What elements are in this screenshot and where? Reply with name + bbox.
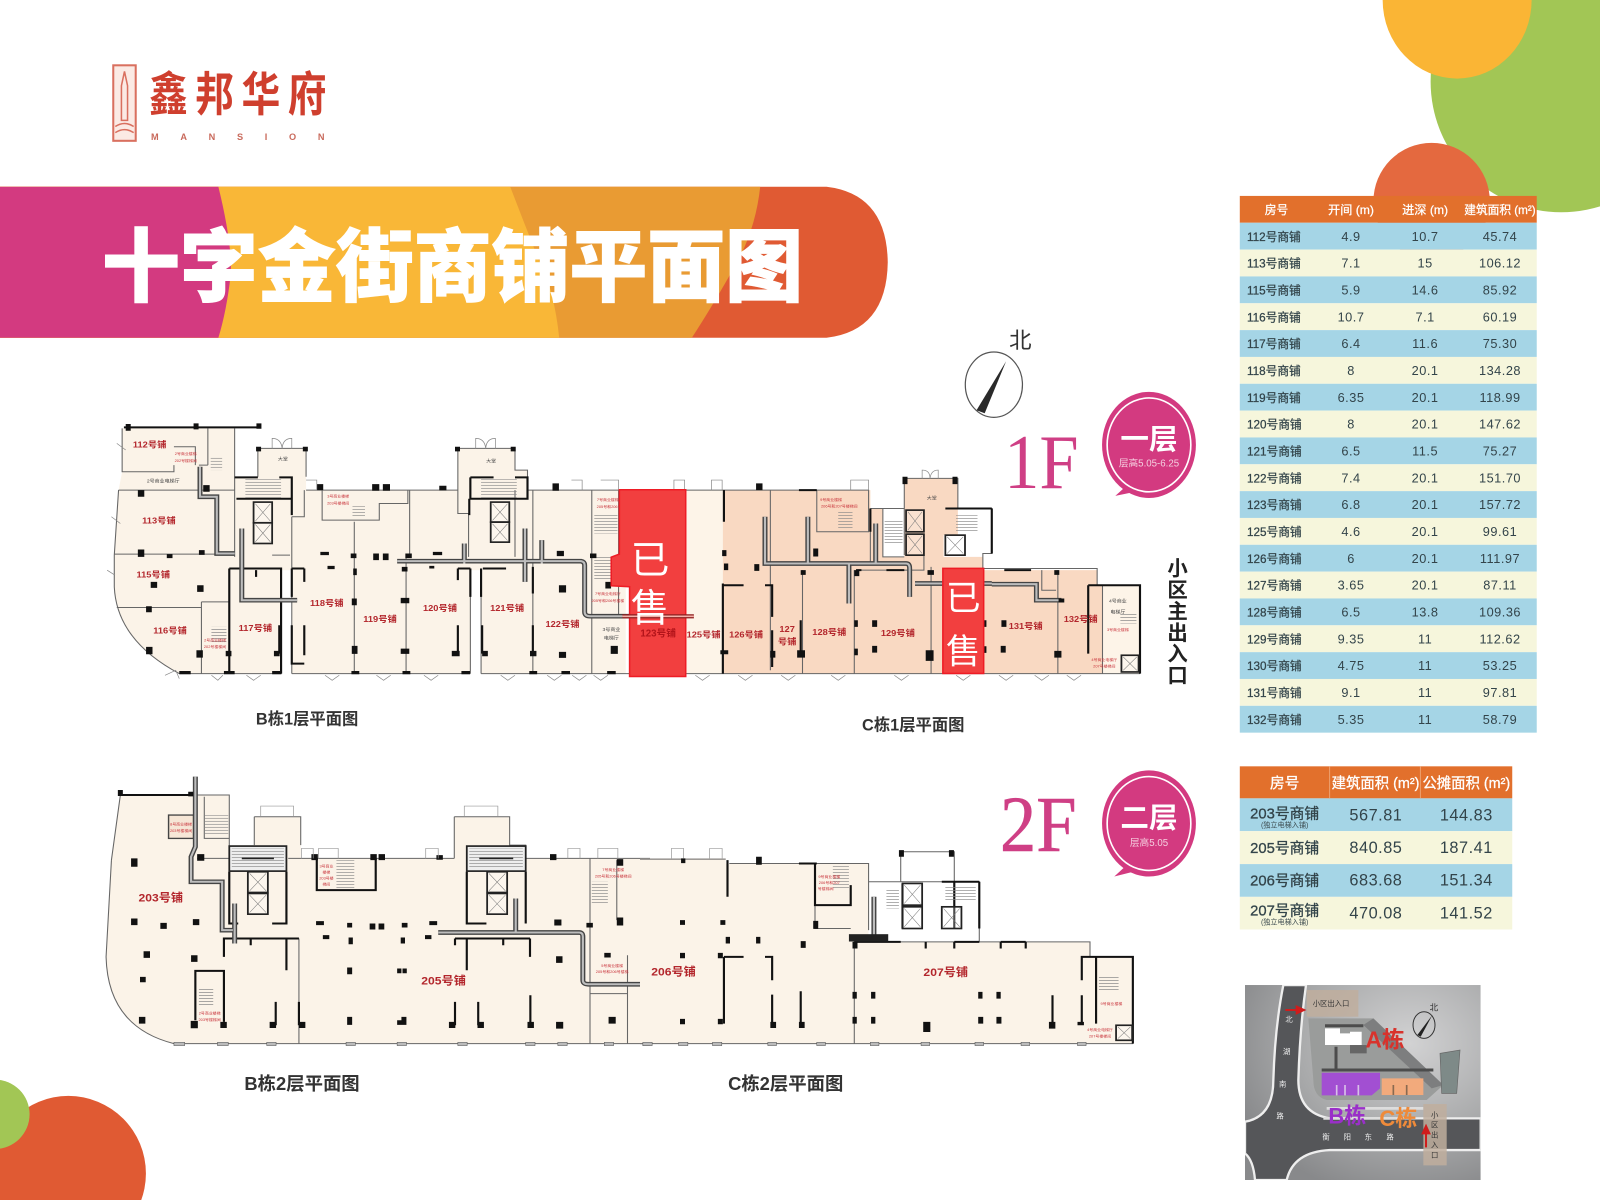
table: first floor shops: 126号商铺 [1247,552,1302,566]
table: first floor shops: 7.4 [1341,470,1361,485]
table: first floor shops: 11.6 [1412,336,1438,351]
road names: 衡 [1322,1132,1330,1141]
decorative circles: bottom left [0,1080,146,1200]
road names: 路 [1386,1132,1394,1141]
table: first floor shops: 115号商铺 [1247,283,1301,297]
table: first floor shops: 20.1 [1412,497,1439,512]
table: first floor shops: 99.61 [1483,524,1517,539]
room labels B 2F: 7号商业楼梯 [602,867,624,872]
table header: 开间 (m) [1328,204,1374,217]
table: first floor shops: 10.7 [1338,309,1364,324]
vertical label: main community entrance: 入 [1167,643,1188,666]
caption: C 2F: C栋2层平面图 [728,1073,843,1094]
caption: B 2F: B栋2层平面图 [244,1073,360,1094]
road names: 阳 [1344,1132,1351,1141]
table: first floor shops: 147.62 [1479,417,1521,432]
title text: 十字金街商铺平面图 [102,203,803,318]
room labels C 1F: 129号铺 [881,628,915,638]
table: first floor shops: 6.5 [1341,444,1361,459]
room labels B 1F: 113号铺 [142,515,176,525]
table: first floor shops: 11 [1418,712,1432,727]
room labels B 1F: 120号铺 [423,603,457,613]
badge: first floor: 层高5.05-6.25 [1119,456,1179,469]
road names [1276,1015,1394,1141]
table: first floor shops: 11 [1418,631,1432,646]
table header [1240,196,1537,223]
room labels C 1F: 131号铺 [1009,621,1043,631]
table: first floor shops: 112.62 [1479,631,1521,646]
building C [1379,1078,1423,1131]
room labels B 1F: 205号和206号楼梯间 [597,504,634,509]
badge: second floor: 二层 [1120,803,1178,835]
room labels B 1F: 202号楼梯间 [204,644,226,649]
table: second floor shops [1240,766,1512,929]
room labels C 2F: 4号商业电梯厅 [1087,1027,1113,1032]
room labels C 2F: 号楼梯间 [818,886,834,891]
table 2 header: 公摊面积 (m²) [1422,775,1510,792]
building B: B栋 [1328,1103,1366,1128]
room labels C 1F: 128号铺 [812,627,846,637]
vertical label: main community entrance: 口 [1167,666,1188,688]
room labels C 1F: 9号商业楼梯 [820,497,842,502]
title banner [0,187,888,338]
room labels C 2F: 207号楼梯间 [1089,1034,1111,1039]
table: first floor shops: 131号商铺 [1247,686,1302,700]
floor plan: building C 1F [674,470,1140,680]
table: first floor shops: 7.1 [1415,309,1435,324]
building A: A栋 [1366,1026,1405,1052]
gate: south entrance: 区 [1431,1120,1438,1129]
table: second floor shops: 205号商铺 [1250,840,1319,857]
table: first floor shops: 11 [1418,685,1432,700]
table: first floor shops: 130号商铺 [1247,659,1302,673]
table: second floor shops: 187.41 [1440,839,1493,857]
table: first floor shops: 15 [1418,256,1433,271]
table: first floor shops: 45.74 [1483,229,1517,244]
logo: 鑫邦华府 [149,70,327,122]
table: first floor shops: 75.27 [1483,444,1517,459]
room labels C 1F: 电梯厅 [1110,609,1126,615]
room labels B 2F: 203号楼梯间 [170,828,192,833]
sold unit 130 [943,568,984,673]
room labels C 1F: 127 [779,624,795,634]
caption: B 1F: B栋1层平面图 [256,709,358,728]
table: first floor shops: 6.4 [1341,336,1361,351]
table: first floor shops: 109.36 [1479,605,1521,620]
room labels C 1F: 206号和207号楼梯间 [821,504,858,508]
table: first floor shops: 6.35 [1338,390,1364,405]
table: first floor shops: 20.1 [1412,417,1439,432]
table: first floor shops: 53.25 [1483,658,1517,673]
sold unit 123: 售 [631,587,669,630]
floor label 1F: 1F [1004,419,1079,505]
room labels B 1F: 112号铺 [133,439,166,449]
room labels B 1F: 117号铺 [239,622,272,633]
table: first floor shops: 134.28 [1479,363,1521,378]
table: first floor shops: 8 [1347,417,1355,432]
table: first floor shops: 8 [1347,363,1355,378]
table: first floor shops: 14.6 [1412,282,1439,297]
room labels B 2F: 203号铺 [138,891,183,904]
badge: first floor [1102,392,1196,498]
table: first floor shops: 85.92 [1483,282,1517,297]
room labels C 2F: 206号铺 [651,965,696,978]
table 2 header [1240,766,1512,798]
gate: south entrance: 口 [1431,1150,1438,1159]
room labels C 1F: 207号楼梯间 [1093,664,1116,669]
room labels B 1F: 119号铺 [363,613,397,624]
room labels B 2F: 205号和206号楼梯间 [595,874,632,878]
table: first floor shops: 106.12 [1479,256,1521,271]
table: first floor shops: 20.1 [1412,470,1439,485]
room labels B 1F: 205号和206号楼梯 [592,598,624,603]
room labels C 1F: 4号商业 [1109,598,1127,604]
road names: 北 [1285,1015,1293,1024]
table: first floor shops: 6.8 [1341,497,1361,512]
room labels B 2F: 8号商业楼梯 [170,822,192,827]
table: first floor shops: 20.1 [1412,578,1439,593]
room labels B 1F: 118号铺 [310,598,344,608]
room labels B 2F: 5号商业楼梯 [601,963,623,968]
room labels B 2F [138,822,632,1022]
table: first floor shops: 119号商铺 [1247,391,1301,405]
room labels B 1F: 2号商业楼梯 [175,451,197,456]
building C: C栋 [1379,1106,1417,1131]
gate: south entrance: 出 [1431,1130,1438,1139]
table: first floor shops: 118.99 [1479,390,1521,405]
room labels C 2F: 9号商业楼梯 [818,874,840,879]
road names: 路 [1276,1112,1284,1121]
table: first floor shops: 5.9 [1341,282,1361,297]
floor plan: building B 1F [107,423,634,680]
table: first floor shops: 20.1 [1412,524,1439,539]
floor plan: building C 2F [640,848,1133,1046]
sold unit 130: 已 [946,580,981,618]
room labels B 1F: 3号商业楼梯 [327,494,349,498]
table: first floor shops: 157.72 [1479,497,1521,512]
room labels C 2F: 206号和207 [819,880,840,885]
room labels B 1F: 电梯厅 [604,635,619,642]
logo: MANSION [151,132,324,142]
room labels B 1F: 2号商业楼梯 [204,638,226,643]
table: first floor shops: 3.65 [1338,578,1364,593]
table: first floor shops: 120号商铺 [1247,418,1302,432]
table: second floor shops: 683.68 [1349,872,1402,890]
table: first floor shops: 75.30 [1483,336,1517,351]
room labels C 2F [651,874,1123,1039]
table: first floor shops: 123号商铺 [1247,498,1302,512]
room labels B 2F: 205号铺 [421,974,466,987]
table: first floor shops: 129号商铺 [1247,632,1302,646]
table: first floor shops: 97.81 [1483,685,1517,700]
room labels B 1F [133,439,634,649]
building A [1325,1028,1404,1050]
room labels C 1F: 3号商业楼梯 [1107,627,1129,632]
road names: 东 [1365,1132,1372,1141]
room labels C 2F: 9号商业楼梯 [1101,1001,1123,1006]
table: first floor shops: 125号商铺 [1247,525,1302,539]
table header: 建筑面积 (m²) [1464,203,1536,217]
badge: second floor: 层高5.05 [1130,836,1168,849]
table: first floor shops: 113号商铺 [1247,257,1301,271]
table: second floor shops: 567.81 [1349,806,1402,824]
table: first floor shops: 121号商铺 [1247,445,1302,459]
table: first floor shops: 128号商铺 [1247,606,1302,620]
room labels B 2F: 203号楼 [319,876,334,880]
table: first floor shops: 127号商铺 [1247,579,1302,593]
table: first floor shops: 6 [1347,551,1355,566]
table: first floor shops: 9.1 [1341,685,1361,700]
room labels B 2F: 205号和206号楼梯 [596,969,629,974]
table: first floor shops: 20.1 [1412,390,1439,405]
site compass [1413,1003,1439,1038]
table: first floor shops: 20.1 [1412,363,1439,378]
room labels C 1F: 125号铺 [687,629,721,640]
sold unit 123: 已 [631,539,669,582]
room labels C 1F: 126号铺 [729,629,763,640]
table: first floor shops: 112号商铺 [1247,230,1301,244]
table: first floor shops: 4.75 [1338,658,1364,673]
room labels C 2F: 207号铺 [923,966,968,979]
table: first floor shops: 13.8 [1412,605,1439,620]
sold unit 123: 123号铺 [640,627,676,640]
table: second floor shops: 203号商铺 [1250,805,1319,822]
table header: 进深 (m) [1402,203,1448,217]
floor label 2F: 2F [1000,781,1077,869]
table: first floor shops: 58.79 [1483,712,1517,727]
table: first floor shops: 5.35 [1338,712,1364,727]
room labels B 2F: 楼梯 [323,870,331,874]
table: first floor shops: 117号商铺 [1247,337,1301,351]
table: second floor shops: 207号商铺 [1250,902,1319,919]
room labels B 1F: 203号楼梯间 [327,501,350,505]
table 2 header: 房号 [1270,775,1299,792]
table: second floor shops: 141.52 [1440,904,1493,922]
room labels B 1F: 115号铺 [136,569,170,579]
room labels B 1F: 7号商业楼梯 [597,497,619,502]
table: first floor shops: 4.9 [1341,229,1361,244]
site compass: 北 [1430,1003,1439,1013]
table: first floor shops: 10.7 [1412,229,1439,244]
building B [1322,1073,1380,1128]
room labels B 1F: 122号铺 [545,618,580,629]
room labels B 1F: 202号楼梯间 [175,458,197,463]
sold unit 130: 售 [946,632,981,671]
table: second floor shops: 144.83 [1440,806,1493,824]
vertical label: main community entrance: 出 [1167,622,1188,645]
table: first floor shops: 118号商铺 [1247,364,1301,378]
table: first floor shops: 7.1 [1341,256,1361,271]
table: first floor shops: 6.5 [1341,605,1361,620]
gate: south entrance [1423,1104,1447,1165]
room labels B 2F: 203号楼梯间 [199,1017,221,1022]
badge: second floor [1102,770,1196,877]
room labels C 1F: 4号商业电梯厅 [1091,657,1117,662]
table: first floor shops: 87.11 [1483,578,1517,593]
room labels B 1F: 3号商业 [603,626,620,633]
table: second floor shops: 206号商铺 [1250,873,1319,890]
gate: north-west entrance: 小区出入口 [1313,999,1349,1008]
room labels B 1F: 大堂 [278,456,288,463]
table: second floor shops: 840.85 [1349,839,1402,857]
decorative circles: top right [1373,0,1600,259]
sold unit 123 [611,490,694,677]
caption: C 1F: C栋1层平面图 [862,716,964,735]
road names: 湖 [1283,1047,1290,1056]
table: first floor shops: 20.1 [1412,551,1439,566]
room labels C 1F [687,495,1129,669]
table: first floor shops: 111.97 [1480,551,1520,566]
gate: north-west entrance [1285,990,1358,1017]
vertical label: main community entrance: 主 [1167,600,1188,623]
gate: south entrance: 入 [1431,1140,1439,1149]
table: second floor shops: 470.08 [1349,904,1402,922]
room labels B 1F: 2号商业电梯厅 [147,478,180,484]
badge: first floor: 一层 [1120,424,1178,456]
vertical label: main community entrance: 小 [1167,558,1188,581]
table: first floor shops [1240,196,1537,733]
room labels C 1F: 大堂 [927,495,937,501]
gate: south entrance: 小 [1431,1110,1439,1119]
table: first floor shops: 122号商铺 [1247,471,1302,485]
site map [1245,985,1481,1180]
table header: 房号 [1265,204,1288,217]
table: first floor shops: 4.6 [1341,524,1361,539]
table: first floor shops: 60.19 [1483,309,1517,324]
vertical label: main community entrance: 区 [1167,580,1188,602]
table: second floor shops: (独立电梯入铺) [1261,917,1308,926]
table: first floor shops: 11 [1418,658,1432,673]
road names: 南 [1279,1080,1286,1089]
room labels B 1F: 大堂 [486,458,496,464]
table: second floor shops: (独立电梯入铺) [1261,821,1308,830]
room labels B 1F: 7号商业电梯厅 [595,591,621,596]
table: second floor shops: 151.34 [1440,872,1493,890]
room labels B 2F: 2号商业楼梯 [199,1010,221,1015]
compass north: 北 [1009,328,1032,353]
room labels B 1F: 121号铺 [490,603,524,613]
table 2 header: 建筑面积 (m²) [1332,775,1419,792]
room labels C 1F: 132号铺 [1064,613,1098,624]
room labels C 1F: 号铺 [778,636,796,647]
table: first floor shops: 116号商铺 [1247,310,1301,324]
table: first floor shops: 151.70 [1479,470,1521,485]
vertical label: main community entrance [1167,558,1188,688]
table: first floor shops: 132号商铺 [1247,713,1302,727]
room labels B 2F: 梯间 [323,882,331,886]
floor plan: building B 2F [106,777,650,1046]
room labels B 1F: 116号铺 [153,625,187,636]
logo [113,65,327,142]
table: first floor shops: 11.5 [1412,444,1438,459]
table: first floor shops: 9.35 [1338,631,1364,646]
compass north [965,328,1032,417]
room labels B 2F: 3号商业 [319,864,334,868]
